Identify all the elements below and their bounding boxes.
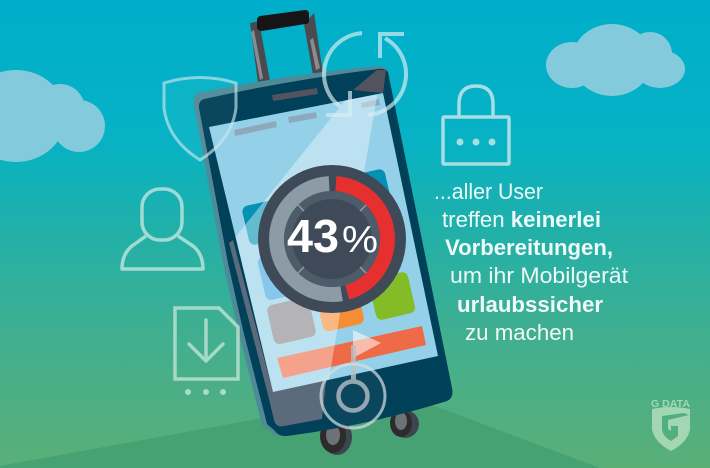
bezel highlight: left and bottom — [229, 240, 326, 426]
text block — [434, 179, 628, 345]
status bar dashes — [234, 99, 380, 136]
app tile: blue — [257, 247, 315, 301]
icon: play and home button — [321, 330, 385, 428]
text block: treffen keinerlei — [442, 207, 601, 232]
logo: G DATA: G DATA — [651, 399, 690, 410]
app tile: green — [368, 271, 416, 321]
wheel: right — [390, 409, 419, 438]
gauge: inner ring — [284, 191, 380, 287]
text block: zu machen — [465, 320, 574, 345]
wheel: left — [320, 419, 352, 455]
light beam — [236, 94, 378, 392]
text block: ...aller User — [434, 179, 543, 204]
gauge percent: % — [342, 219, 378, 261]
gauge value: 43 — [287, 210, 339, 262]
bezel highlight: top — [353, 70, 386, 93]
cloud: left — [0, 70, 105, 162]
suitcase handle — [250, 10, 323, 83]
cloud: right — [546, 24, 685, 96]
app tile: teal right — [345, 168, 395, 226]
dots — [185, 389, 226, 395]
app tile: teal left — [241, 194, 307, 246]
gauge: grey arc — [277, 184, 342, 295]
app tile: grey — [266, 297, 317, 345]
icon: person — [122, 189, 203, 269]
gauge ticks — [298, 205, 366, 273]
icon: shield — [164, 78, 236, 160]
text block: um ihr Mobilgerät — [450, 263, 628, 288]
phone body — [194, 66, 452, 436]
icon: sync arrows — [324, 33, 406, 115]
icon: download file — [175, 308, 238, 395]
phone speaker — [272, 88, 318, 101]
app tile: orange — [317, 291, 365, 332]
hills — [0, 393, 600, 468]
phone screen — [209, 93, 438, 392]
gauge: inner disk — [292, 199, 372, 279]
media bar — [277, 326, 426, 378]
donut gauge — [258, 165, 406, 313]
logo: G DATA — [651, 399, 690, 451]
text block: urlaubssicher — [457, 292, 603, 317]
icon: lock — [443, 86, 509, 164]
text block: Vorbereitungen, — [445, 235, 613, 260]
gauge: red arc — [336, 184, 387, 292]
